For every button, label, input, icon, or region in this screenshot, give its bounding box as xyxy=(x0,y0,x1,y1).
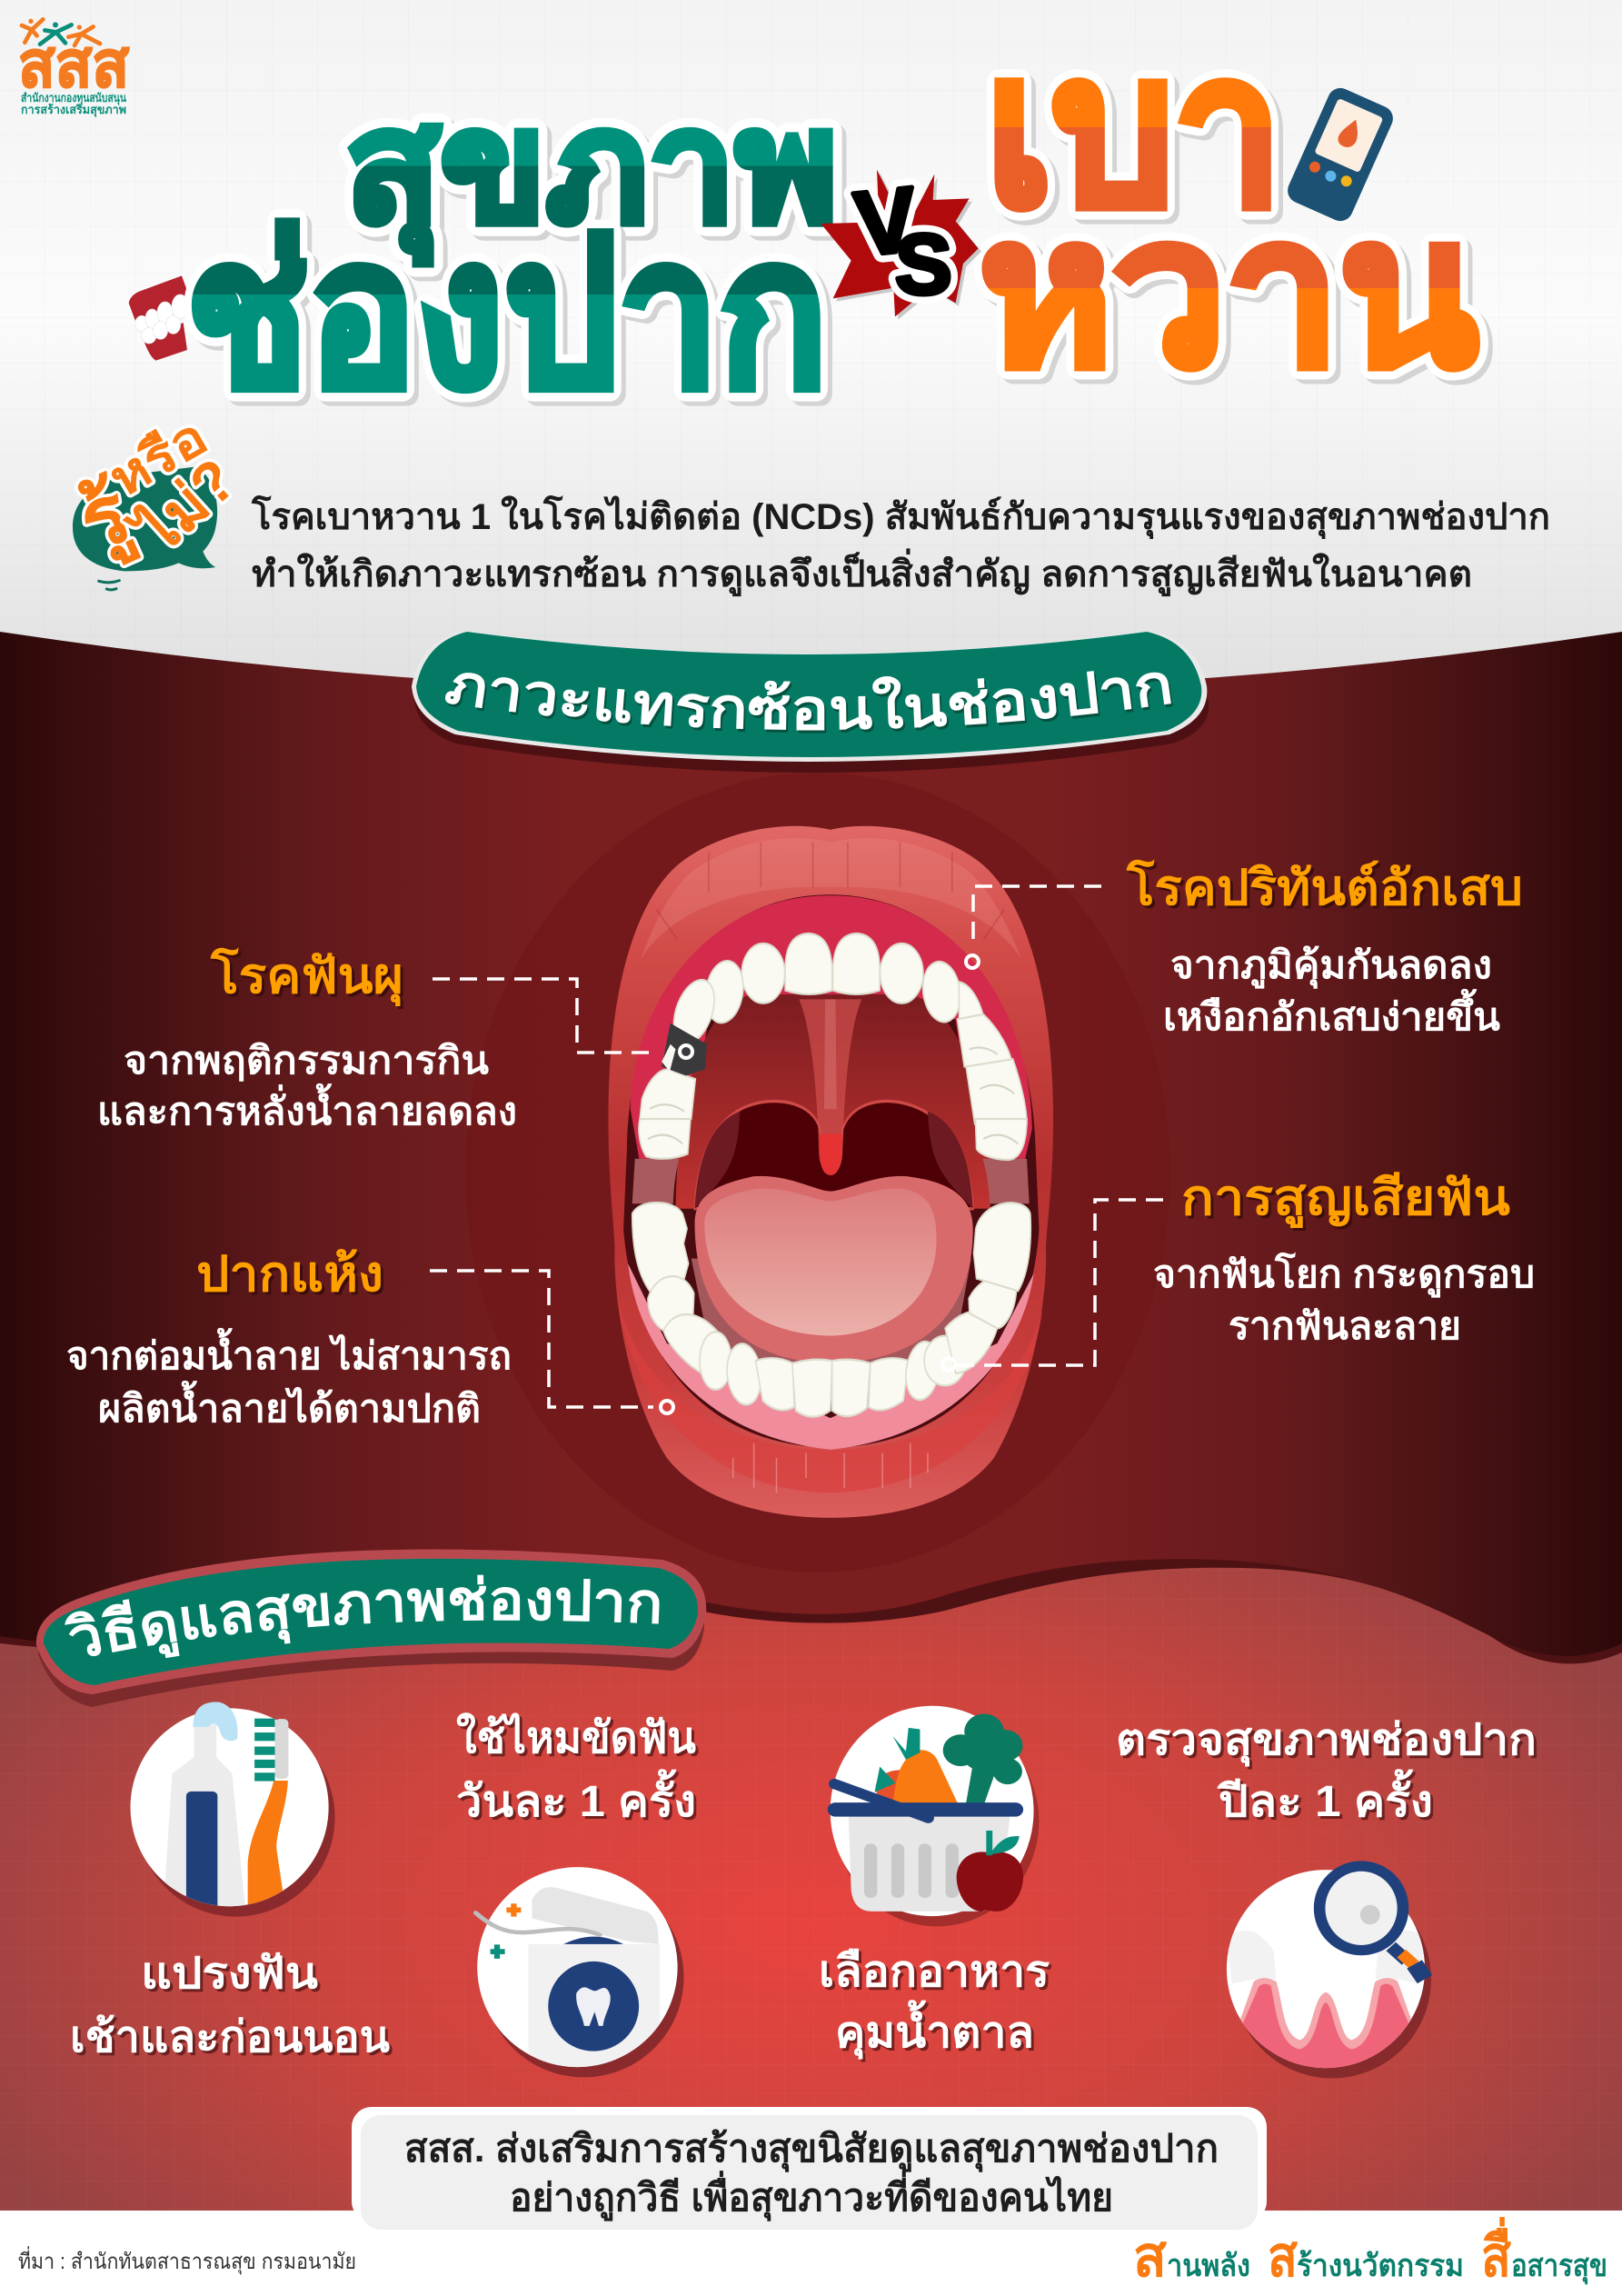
box text: อย่างถูกวิธี เพื่อสุขภาวะที่ดีของคนไทย xyxy=(510,2171,1113,2221)
lens detail xyxy=(1360,1905,1380,1924)
uvula stem xyxy=(799,999,861,1173)
title: diabetes: เบา xyxy=(986,14,1282,249)
intro text: โรคเบาหวาน 1 ในโรคไม่ติดต่อ (NCDs) สัมพันธ์กับความรุนแรงของสุขภาพช่องปาก xyxy=(251,495,1550,540)
brush head xyxy=(274,1719,288,1779)
box text: สสส. ส่งเสริมการสร้างสุขนิสัยดูแลสุขภาพช่องปาก xyxy=(404,2127,1219,2172)
decayed tooth xyxy=(662,1023,707,1075)
section banner: complications xyxy=(412,632,1209,773)
gum xyxy=(1221,1984,1430,2072)
vs letters xyxy=(851,168,952,312)
basket slots xyxy=(864,1843,959,1898)
banner border xyxy=(412,631,1207,762)
lid xyxy=(532,1887,659,1944)
callout: dry mouth: ปากแห้ง xyxy=(196,1247,383,1302)
callout: periodontitis: จากภูมิคุ้มกันลดลง xyxy=(1170,943,1492,989)
callout: dry mouth xyxy=(66,1247,512,1430)
badge: did you know xyxy=(65,407,249,590)
callout: tooth loss xyxy=(1153,1171,1535,1347)
tongue outer xyxy=(695,1176,973,1363)
footer slogan: ส xyxy=(1268,2226,1298,2289)
disc xyxy=(831,1706,1034,1916)
vs outline xyxy=(851,168,952,312)
banner shadow xyxy=(414,642,1209,773)
apple stem xyxy=(990,1831,1015,1855)
callout lines xyxy=(430,886,1163,1407)
tomato leaf xyxy=(874,1767,895,1792)
decayed tooth enamel xyxy=(662,1044,676,1072)
wave shadow xyxy=(0,1559,1622,1727)
logo caption: สำนักงานกองทุนสนับสนุน xyxy=(21,91,126,105)
box text xyxy=(404,2127,1219,2221)
title: oral health: สุขภาพ xyxy=(345,80,838,265)
floss thread xyxy=(475,1912,600,1935)
footer slogan xyxy=(1133,2217,1607,2289)
callout: periodontitis: โรคปริทันต์อักเสบ xyxy=(1126,859,1523,915)
callout: tooth decay xyxy=(97,947,517,1133)
callout: tooth decay: โรคฟันผุ xyxy=(210,947,403,1007)
banner text: วิธีดูแลสุขภาพช่องปาก xyxy=(65,1574,660,1658)
vs letters: V xyxy=(851,168,921,275)
carrot leaves xyxy=(893,1728,920,1760)
disc xyxy=(1227,1870,1425,2068)
icon: toothbrush and toothpaste xyxy=(131,1702,335,1919)
lip creases xyxy=(656,843,1004,1492)
label: food: เลือกอาหาร xyxy=(819,1948,1050,1996)
source note: ที่มา : สำนักทันตสาธารณสุข กรมอนามัย xyxy=(18,2246,356,2275)
label: brush xyxy=(70,1950,390,2061)
magnifier lens xyxy=(1319,1866,1403,1951)
lower lip shade xyxy=(616,1293,1042,1492)
callout: periodontitis: เหงือกอักเสบง่ายขึ้น xyxy=(1163,988,1500,1038)
molar creases xyxy=(646,1047,1021,1266)
upper gum xyxy=(631,895,1032,1159)
spool xyxy=(548,1962,639,2051)
handle xyxy=(248,1781,288,1919)
banner fill xyxy=(416,632,1201,757)
background: dark halo behind mouth xyxy=(465,773,1170,1572)
tube label xyxy=(186,1792,217,1918)
logo: ThaiHealth xyxy=(18,19,129,117)
callout: dry mouth: จากต่อมน้ำลาย ไม่สามารถ xyxy=(66,1327,512,1377)
shadow xyxy=(136,1719,335,1917)
icon: dental check-up xyxy=(1221,1866,1431,2078)
callout markers xyxy=(661,955,979,1413)
label: floss: ใช้ไหมขัดฟัน xyxy=(456,1712,696,1762)
footer slogan: านพลัง xyxy=(1167,2249,1250,2283)
vs outline: V xyxy=(851,168,921,275)
logo wordmark: สสส xyxy=(18,29,129,100)
upper teeth xyxy=(639,933,1027,1160)
intro text: ทำให้เกิดภาวะแทรกซ้อน การดูแลจึงเป็นสิ่งสำคัญ ลดการสูญเสียฟันในอนาคต xyxy=(252,548,1472,596)
shadow xyxy=(835,1716,1039,1926)
label: food: คุมน้ำตาล xyxy=(835,2000,1034,2060)
tooth xyxy=(576,1987,611,2026)
callout: tooth decay: จากพฤติกรรมการกิน xyxy=(124,1039,489,1082)
lips xyxy=(608,826,1053,1518)
basket xyxy=(849,1816,1010,1912)
gum edge xyxy=(1221,1978,1430,2072)
box xyxy=(528,1944,660,2075)
logo caption: การสร้างเสริมสุขภาพ xyxy=(21,103,126,117)
badge words xyxy=(65,407,249,574)
bristles xyxy=(254,1719,274,1782)
cavity xyxy=(623,894,1039,1448)
box outer xyxy=(352,2107,1267,2221)
label: check-up xyxy=(1116,1716,1537,1826)
icon: healthy food basket xyxy=(828,1706,1039,1926)
icon: dental floss xyxy=(475,1867,684,2077)
burst xyxy=(821,170,981,320)
footer slogan: ส xyxy=(1133,2226,1167,2289)
label: floss: วันละ 1 ครั้ง xyxy=(456,1769,696,1826)
banner border xyxy=(36,1550,706,1694)
intro text xyxy=(251,495,1550,596)
label: brush: เช้าและก่อนนอน xyxy=(70,2013,390,2061)
mouth floor xyxy=(692,1259,971,1373)
plus signs xyxy=(506,1903,521,1917)
teeth xyxy=(135,294,189,344)
banner fill xyxy=(44,1559,698,1685)
disc xyxy=(477,1867,678,2067)
upper lip highlight xyxy=(641,838,1021,960)
logo figures xyxy=(22,19,100,45)
palate xyxy=(676,994,990,1209)
carrot xyxy=(893,1750,958,1804)
lower jaw xyxy=(144,323,187,361)
title: oral health xyxy=(186,80,838,430)
broccoli xyxy=(943,1714,1023,1804)
tube xyxy=(165,1725,245,1907)
callout: tooth loss: รากฟันละลาย xyxy=(1229,1304,1461,1347)
shadow xyxy=(483,1877,684,2077)
care labels xyxy=(70,1712,1537,2061)
throat xyxy=(695,1102,973,1209)
illustration: open mouth xyxy=(608,826,1053,1518)
vs letters: S xyxy=(895,216,952,312)
logo caption xyxy=(21,91,126,117)
footer slogan: สื่ xyxy=(1481,2217,1511,2289)
disc xyxy=(131,1708,329,1906)
title: oral health: สุขภาพ xyxy=(345,80,838,265)
badge words: หรือ xyxy=(100,407,216,507)
vs outline: S xyxy=(895,216,952,312)
icon: glucose meter xyxy=(1284,84,1397,225)
footer slogan: ร้างนวัตกรรม xyxy=(1297,2249,1464,2283)
lower teeth xyxy=(632,1203,1030,1417)
badge words: รู้ xyxy=(65,466,146,574)
title: diabetes: หวาน xyxy=(980,177,1478,407)
label: check-up: ตรวจสุขภาพช่องปาก xyxy=(1116,1716,1537,1767)
spool top xyxy=(563,1936,623,1944)
basket rim xyxy=(828,1802,1023,1817)
callout: tooth decay: และการหลั่งน้ำลายลดลง xyxy=(97,1083,517,1133)
banner shadow xyxy=(38,1561,704,1707)
message box xyxy=(352,2107,1267,2230)
title: oral health: ช่องปาก xyxy=(186,199,828,430)
section banner: oral care xyxy=(36,1549,707,1707)
cheeks xyxy=(632,1159,1030,1203)
tomato xyxy=(876,1770,926,1805)
callout: dry mouth: ผลิตน้ำลายได้ตามปกติ xyxy=(98,1380,481,1430)
lower gum xyxy=(628,1263,1034,1450)
title: diabetes: หวาน xyxy=(980,177,1478,407)
label: floss xyxy=(456,1712,696,1826)
magnifier handle xyxy=(1391,1946,1407,1961)
box inner xyxy=(361,2115,1258,2230)
vs burst xyxy=(821,168,981,320)
uvula tip xyxy=(820,1133,842,1174)
label: check-up: ปีละ 1 ครั้ง xyxy=(1217,1769,1433,1826)
background: red care section xyxy=(0,1568,1622,2211)
title: diabetes xyxy=(980,14,1478,407)
background: light top xyxy=(0,0,1622,709)
title: diabetes: เบา xyxy=(986,14,1282,249)
banner text: ภาวะแทรกซ้อนในช่องปาก xyxy=(445,671,1173,733)
label: brush: แปรงฟัน xyxy=(141,1950,318,1998)
paste xyxy=(193,1702,238,1741)
label: food xyxy=(819,1948,1050,2060)
footer slogan: อสารสุข xyxy=(1511,2249,1607,2285)
speech bubble xyxy=(73,466,217,590)
tongue inner xyxy=(704,1189,937,1336)
badge words: ไม่? xyxy=(121,444,249,569)
upper jaw xyxy=(129,275,194,324)
callout: tooth loss: การสูญเสียฟัน xyxy=(1181,1171,1510,1228)
throat sides xyxy=(695,1112,973,1209)
tooth shading xyxy=(1227,1931,1425,1984)
callout: tooth loss: จากฟันโยก กระดูกรอบ xyxy=(1153,1252,1535,1298)
title: oral health: ช่องปาก xyxy=(186,199,828,430)
icon: dentures xyxy=(129,275,194,361)
apple xyxy=(957,1852,1023,1912)
shadow xyxy=(1233,1880,1431,2078)
background: dark red middle xyxy=(0,632,1622,1727)
basket handle xyxy=(834,1784,929,1818)
callout: periodontitis xyxy=(1126,859,1523,1038)
raphe xyxy=(824,999,837,1109)
